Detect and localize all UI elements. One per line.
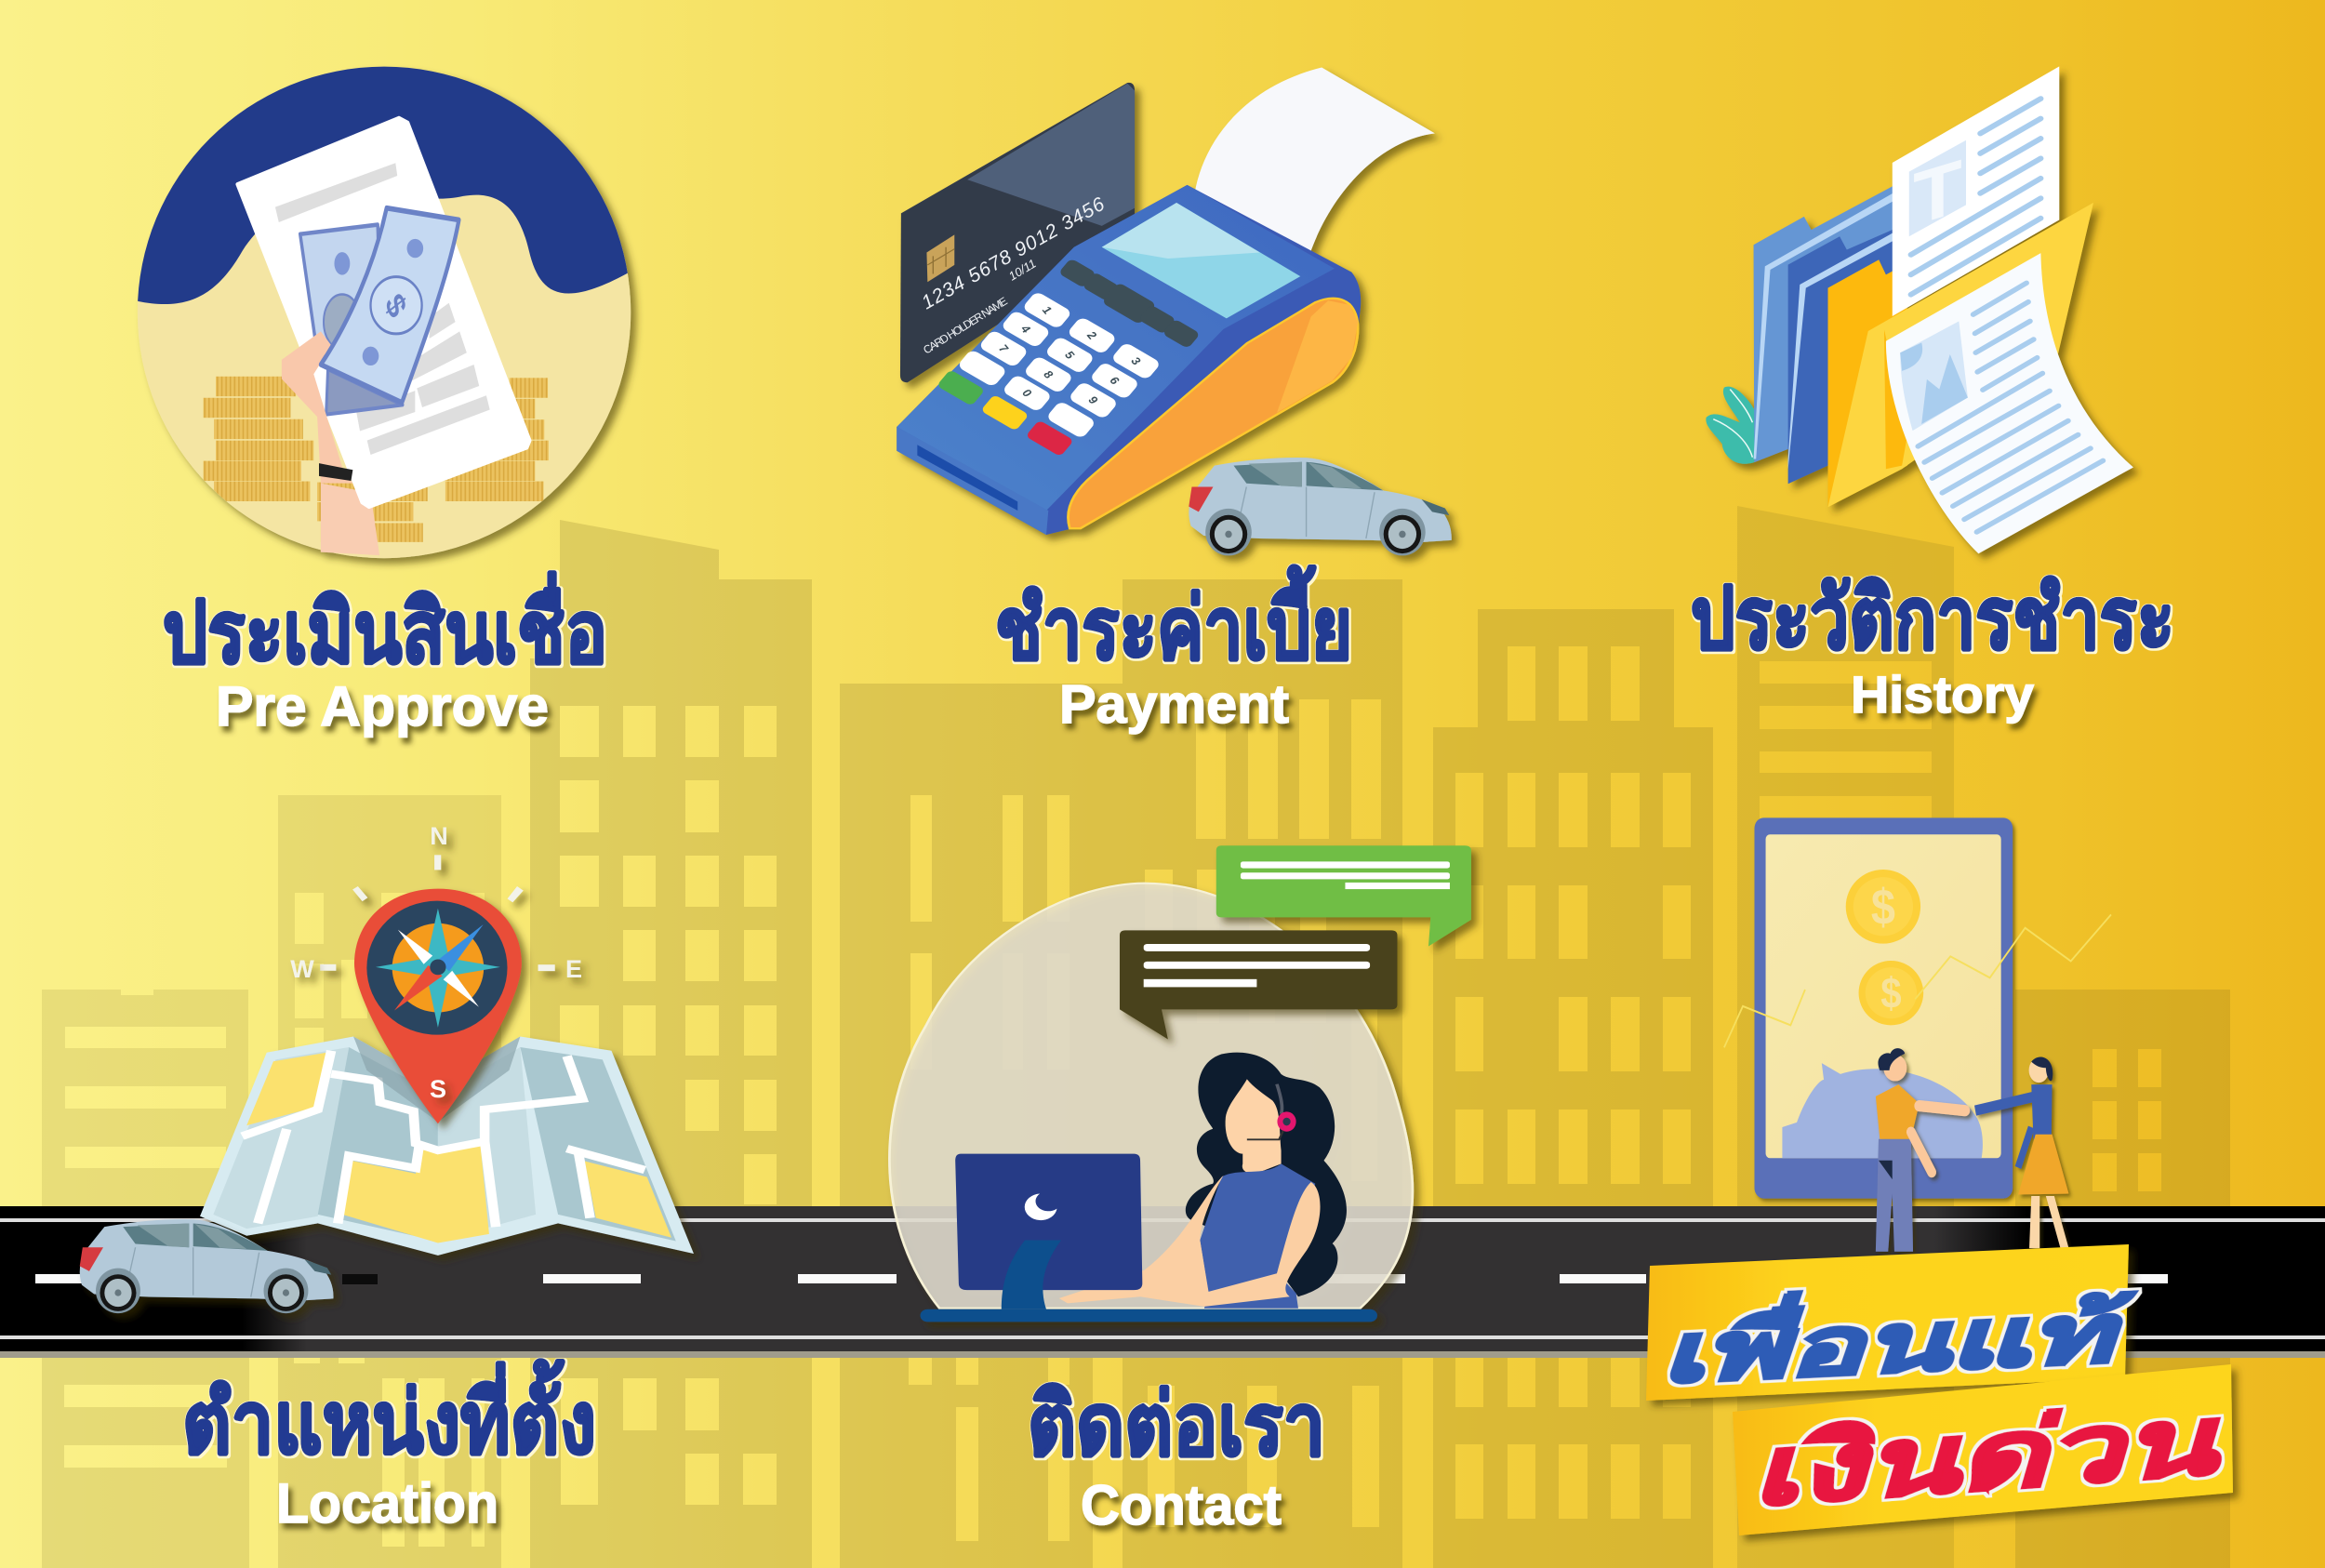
heading: english: Location (276, 1472, 498, 1535)
icon: card terminal with credit card and receipt: 4 (1017, 324, 1033, 335)
icon: hand holding bills over paper in a circle (128, 37, 634, 558)
compass letters: W (290, 955, 314, 983)
card number: 1234 5678 9012 3456 (918, 193, 1109, 313)
compass letters: S (430, 1075, 446, 1103)
road (0, 1206, 2325, 1358)
card expiry: 10/11 (1006, 256, 1039, 284)
panel: contact (889, 845, 1471, 1536)
icon: card terminal with credit card and receipt: 9 (1085, 394, 1101, 406)
icon: call-centre agent in dome (889, 884, 1413, 1322)
icon: card terminal with credit card and receipt: 3 (1128, 355, 1144, 367)
card holder: CARD HOLDER NAME (921, 295, 1010, 357)
panel: history (1691, 66, 2174, 724)
icon: map pin with compass (320, 855, 555, 1123)
heading: english: Contact (1081, 1474, 1282, 1536)
icon: folders and documents (1706, 66, 2133, 553)
heading: thai: ตำแหน่งที่ตั้ง (182, 1360, 596, 1471)
heading: thai: ประเมินสินเชื่อ (163, 571, 607, 681)
heading: english: History (1851, 665, 2034, 724)
icon: card terminal with credit card and receipt: 5 (1062, 350, 1077, 361)
icon: silver car (1189, 458, 1452, 555)
icon: phone with coins and handshake: $ (1871, 879, 1895, 935)
panel: brand illustration (1646, 817, 2233, 1535)
compass letters: E (565, 955, 582, 983)
heading: thai: ติดต่อเรา (1028, 1376, 1325, 1473)
banner: เพื่อนแท้ (1646, 1244, 2139, 1401)
banner: เงินด่วน (1733, 1364, 2233, 1535)
icon: silver car (80, 1219, 334, 1313)
background: city skyline below road (42, 1357, 2230, 1568)
banner: เพื่อนแท้: เพื่อนแท้ (1658, 1276, 2139, 1400)
icon: brown speech bubble (1120, 930, 1397, 1039)
panel: location (80, 822, 694, 1535)
icon: phone with coins and handshake (1724, 817, 2111, 1252)
icon: card terminal with credit card and receipt: 2 (1084, 330, 1099, 341)
compass letters: N (430, 822, 448, 850)
icon: hand holding bills over paper in a circle: $ (379, 287, 412, 325)
compass letters (290, 822, 582, 1103)
banner: เงินด่วน: เงินด่วน (1747, 1389, 2224, 1525)
panel: payment (897, 68, 1452, 735)
icon: card terminal with credit card and receipt: 1 (1039, 304, 1055, 316)
icon: card terminal with credit card and receipt: 0 (1019, 388, 1035, 399)
icon: green speech bubble (1216, 845, 1471, 946)
icon: card terminal with credit card and receipt: 8 (1041, 369, 1056, 380)
icon: card terminal with credit card and receipt: 6 (1107, 375, 1123, 387)
icon: card terminal with credit card and receipt: 7 (995, 343, 1011, 354)
heading: thai: ชำระค่าเบี้ย (995, 565, 1352, 677)
heading: english: Payment (1059, 674, 1289, 735)
icon: folded map (200, 1036, 694, 1256)
background: city skyline above road (42, 506, 2230, 1206)
heading: thai: ประวัติการชำระ (1691, 570, 2174, 667)
icon: folders and documents: T (1913, 144, 1962, 242)
heading: english: Pre Approve (216, 675, 549, 737)
panel: pre approve (128, 37, 634, 737)
icon: card terminal with credit card and receipt (897, 68, 1435, 535)
icon: phone with coins and handshake: $ (1880, 970, 1902, 1017)
